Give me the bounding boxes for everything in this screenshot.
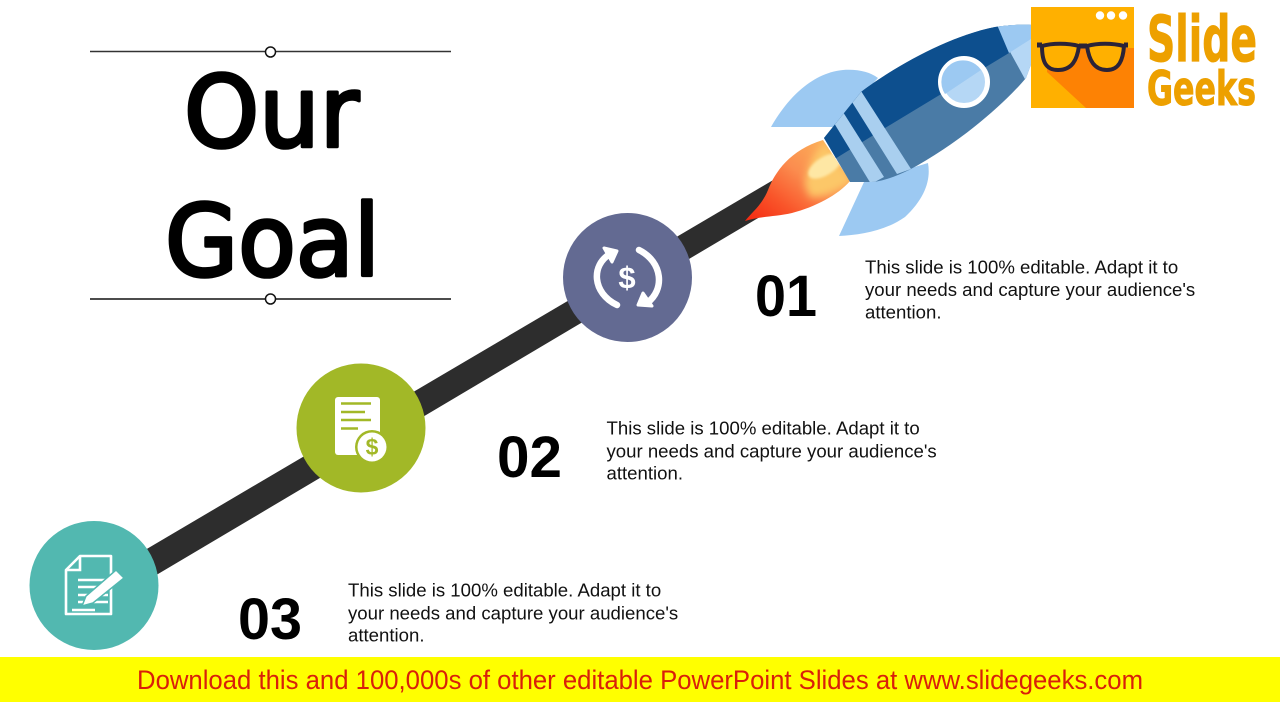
title text: Goal: [165, 184, 380, 300]
step 02 text: This slide is 100% editable. Adapt it to: [606, 418, 920, 438]
bottom rule: [90, 294, 451, 304]
step 03 circle with document icon: [30, 521, 158, 650]
road: diagonal path: [94, 176, 780, 612]
title text: Our: [184, 56, 359, 170]
rocket: [745, 24, 1031, 236]
step 01 text: attention.: [865, 302, 942, 322]
step 01 text: This slide is 100% editable. Adapt it to: [865, 256, 1178, 278]
icon: document and pen: [66, 556, 124, 614]
logo wordmark: [1147, 3, 1257, 117]
rocket body: [824, 24, 1031, 182]
icon: dollar cycle: $: [618, 260, 636, 295]
step 03 text: attention.: [348, 624, 424, 646]
top rule: [90, 47, 451, 57]
title text: [165, 56, 380, 300]
icon: invoice: $: [366, 434, 379, 460]
download banner: Download this and 100,000s of other editable PowerPoint Slides at www.slidegeeks.com: [137, 665, 1143, 695]
step 03 number: 03: [238, 587, 302, 652]
step 02 text: your needs and capture your audience's: [606, 440, 937, 462]
title block: [90, 47, 451, 304]
logo: Slide Geeks: [1031, 3, 1257, 117]
rocket lower fin: [839, 163, 929, 236]
step 01 text: your needs and capture your audience's: [865, 279, 1195, 300]
step 01 circle with money cycle icon: [563, 213, 692, 342]
rocket window: [940, 58, 988, 106]
logo glasses: [1037, 44, 1128, 70]
step 01 number: 01: [755, 264, 817, 329]
rocket upper fin: [771, 70, 878, 127]
download banner: [0, 657, 1280, 702]
logo square: [1031, 7, 1134, 108]
step 02 text: attention.: [606, 462, 683, 484]
step 02 circle with invoice icon: [296, 364, 426, 492]
step 03 text: This slide is 100% editable. Adapt it to: [348, 580, 661, 600]
step 02 number: 02: [497, 425, 562, 490]
step 03 text: your needs and capture your audience's: [348, 602, 678, 624]
logo dots: [1096, 11, 1127, 20]
rocket flame: [745, 140, 850, 221]
